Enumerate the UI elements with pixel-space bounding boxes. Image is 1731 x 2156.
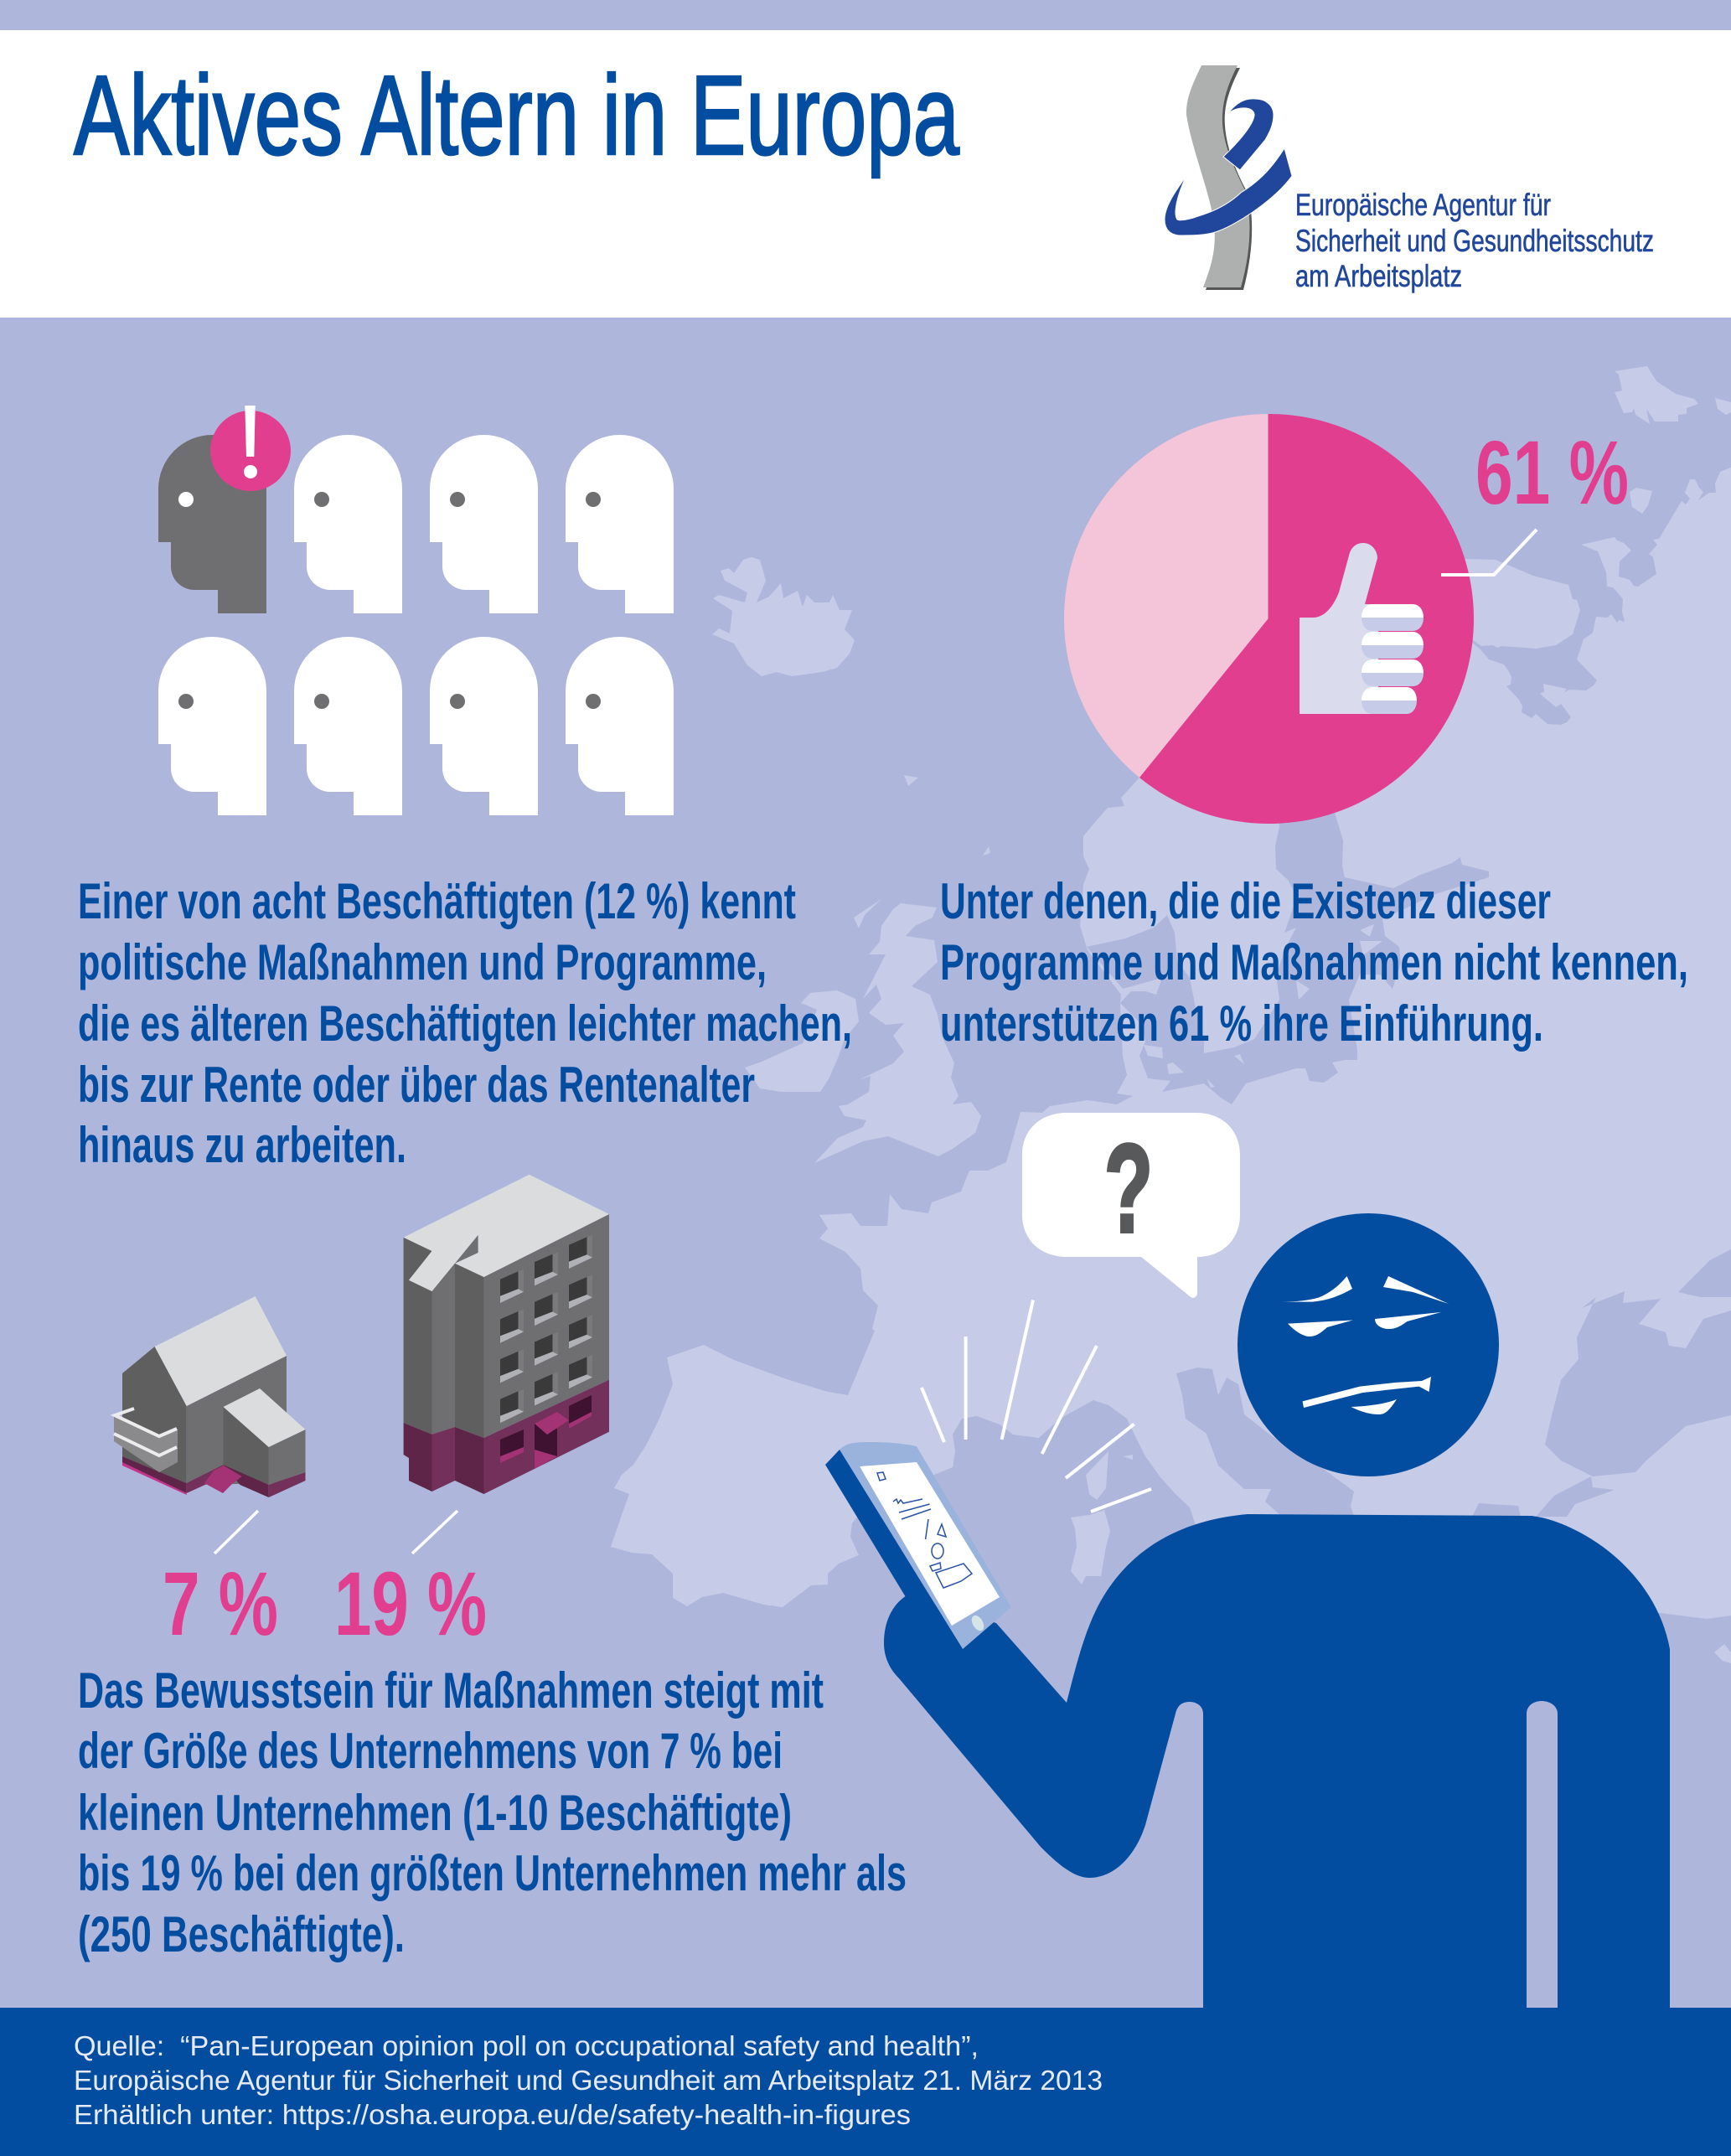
value: 61 percent: 61 % [1475, 421, 1629, 523]
value: 19 percent: 19 % [334, 1553, 487, 1654]
leader line for 7 percent [214, 1511, 258, 1554]
body and arm [884, 1514, 1670, 2008]
figure: person with phone [825, 1213, 1670, 2008]
text block: company size: der Größe des Unternehmens von 7 % bei [78, 1723, 783, 1779]
text block: support [940, 873, 1688, 1052]
head 5 [158, 637, 266, 815]
map of Europe [611, 366, 1731, 1619]
text block: company size: Das Bewusstsein für Maßnahmen steigt mit [78, 1662, 824, 1719]
text block: company size: bis 19 % bei den größten Unternehmen mehr als [78, 1845, 907, 1901]
head 8 [566, 637, 674, 815]
text block: awareness: die es älteren Beschäftigten leichter machen, [78, 995, 852, 1052]
phone signal rays [922, 1300, 1151, 1512]
head [1238, 1213, 1499, 1476]
text block: awareness: Einer von acht Beschäftigten (12 %) kennt [78, 873, 796, 929]
icon: thumbs up [1300, 543, 1424, 714]
islands in the seas [1071, 924, 1731, 1663]
head 6 [294, 637, 402, 815]
icon: small house [114, 1296, 305, 1497]
icon: exclamation badge [210, 406, 291, 491]
pie chart: 61 percent [1064, 414, 1474, 824]
value: 7 percent: 7 % [163, 1553, 278, 1654]
title: Aktives Altern in Europa [74, 52, 960, 178]
text block: company size: kleinen Unternehmen (1-10 Beschäftigte) [78, 1785, 792, 1841]
icon: tall building [404, 1175, 609, 1494]
icon: smartphone [825, 1442, 1011, 1649]
text block: awareness: hinaus zu arbeiten. [78, 1117, 406, 1173]
source text: Quelle: “Pan-European opinion poll on occupational safety and health”, [74, 2030, 979, 2061]
speech bubble with question mark [1022, 1113, 1240, 1298]
logo text: Europäische Agentur für [1295, 188, 1551, 222]
head: highlighted grey [158, 435, 266, 613]
head 4 [566, 435, 674, 613]
face: eyebrows, eyes and mouth [1277, 1276, 1449, 1414]
source text: Erhältlich unter: https://osha.europa.eu/de/safety-health-in-figures [74, 2099, 911, 2130]
top band and white header [0, 30, 1731, 318]
logo text [1295, 188, 1654, 293]
head 3 [430, 435, 538, 613]
text block: awareness: bis zur Rente oder über das Rentenalter [78, 1057, 755, 1113]
source text: Europäische Agentur für Sicherheit und Gesundheit am Arbeitsplatz 21. März 2013 [74, 2065, 1103, 2096]
logo ribbon [1165, 65, 1292, 290]
head 2 [294, 435, 402, 613]
logo: European Agency [1165, 65, 1654, 293]
icon group: eight heads [158, 406, 674, 815]
text block: awareness: politische Maßnahmen und Programme, [78, 934, 767, 990]
head 7 [430, 637, 538, 815]
speech bubble with question mark: ? [1104, 1118, 1153, 1259]
source text [74, 2030, 1103, 2130]
logo text: am Arbeitsplatz [1295, 259, 1462, 293]
leader line for 61 percent [1441, 530, 1537, 575]
building windows [500, 1235, 592, 1423]
footer band [0, 2008, 1731, 2156]
text block: awareness [78, 873, 852, 1173]
leader line for 19 percent [412, 1511, 457, 1554]
seas overlaid on the map [1087, 813, 1731, 1517]
text block: company size [78, 1662, 907, 1962]
text block: company size: (250 Beschäftigte). [78, 1906, 405, 1962]
